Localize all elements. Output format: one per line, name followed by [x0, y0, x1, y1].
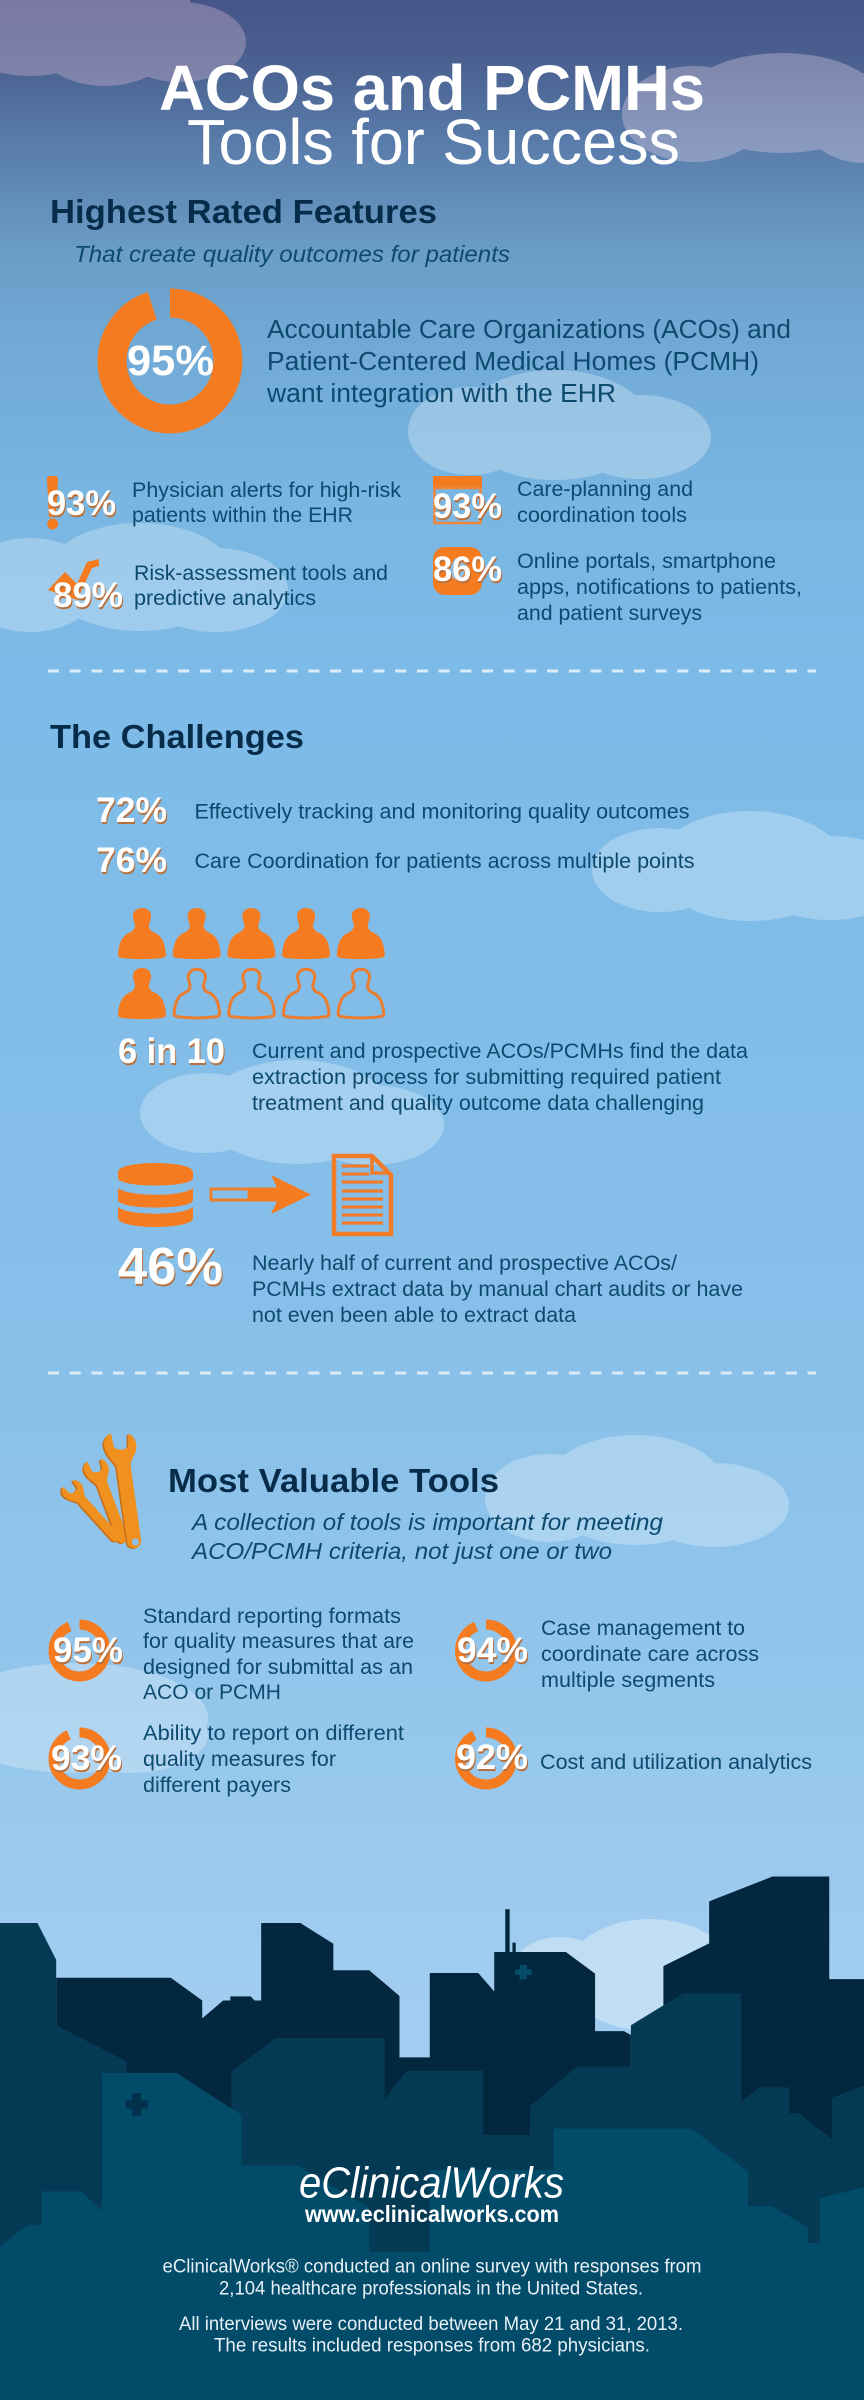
cloud: most valuable tools — [485, 1435, 789, 1547]
stat: 46%: Nearly half of current and prospective ACOs/ — [252, 1251, 677, 1275]
stat: 72%: 72% — [96, 791, 167, 830]
item: online portals 86%: apps, notifications to patients, — [517, 575, 802, 599]
item: case management 94% — [457, 1616, 759, 1692]
arrow — [211, 1175, 311, 1214]
mid buildings — [0, 1923, 864, 2400]
icon: calendar — [433, 476, 482, 523]
icon: hospital cross lower — [126, 2093, 148, 2116]
survey note: All interviews were conducted between May 21 and 31, 2013. — [179, 2314, 683, 2335]
stat: 6 in 10: Current and prospective ACOs/PCMHs find the data — [252, 1039, 748, 1063]
stat: 76% — [96, 841, 694, 880]
item: case management 94%: Case management to — [541, 1616, 745, 1640]
logo: www.eclinicalworks.com — [304, 2201, 559, 2227]
cloud: lower left — [0, 1663, 208, 1773]
icon: database — [118, 1163, 193, 1227]
stat: 6 in 10 — [118, 1032, 748, 1115]
stat: 6 in 10: extraction process for submitting required patient — [252, 1065, 721, 1089]
survey note: 2,104 healthcare professionals in the United States. — [219, 2279, 643, 2300]
item: standard reporting 95%: for quality measures that are — [143, 1629, 414, 1653]
heading: Highest Rated Features — [50, 194, 437, 231]
subheading: A collection of tools is important for meeting — [190, 1509, 663, 1535]
item: risk assessment 89% — [48, 559, 388, 615]
donut chart: 95%: 95% — [127, 337, 214, 385]
item: different payers 93%: Ability to report on different — [143, 1721, 404, 1745]
item: different payers 93%: different payers — [143, 1773, 291, 1797]
cloud: left behind risk assessment — [0, 523, 288, 632]
cloud: top right — [622, 53, 864, 163]
icon: exclamation mark — [47, 476, 58, 530]
icon: hospital cross upper — [515, 1965, 532, 1980]
donut — [460, 1732, 512, 1784]
item: physician alerts 93% — [47, 476, 401, 530]
item: standard reporting 95%: ACO or PCMH — [143, 1680, 281, 1704]
stat: 76%: Care Coordination for patients across multiple points — [194, 849, 694, 873]
item: standard reporting 95%: designed for submittal as an — [143, 1655, 413, 1679]
icon: app tile — [433, 547, 482, 595]
item: risk assessment 89%: predictive analytics — [134, 586, 316, 610]
item: physician alerts 93%: patients within the EHR — [132, 503, 353, 527]
item: risk assessment 89%: 89% — [53, 576, 123, 615]
title: Tools for Success — [187, 106, 680, 178]
item: case management 94%: 94% — [457, 1631, 528, 1670]
cloud: top left — [0, 0, 246, 86]
cloud: challenges middle — [140, 1060, 444, 1165]
item: care planning 93%: 93% — [433, 487, 502, 526]
stat: 6 in 10: 6 in 10 — [118, 1032, 225, 1071]
item: care planning 93%: Care-planning and — [517, 477, 693, 501]
item: standard reporting 95%: Standard reporting formats — [143, 1604, 401, 1628]
stat: 72%: Effectively tracking and monitoring quality outcomes — [194, 800, 690, 824]
item: care planning 93% — [433, 476, 693, 527]
logo — [299, 2158, 564, 2227]
item: cost analytics 92%: Cost and utilization analytics — [540, 1750, 812, 1774]
stat: 76%: 76% — [96, 841, 167, 880]
item: standard reporting 95%: 95% — [53, 1631, 123, 1670]
survey note: The results included responses from 682 physicians. — [214, 2336, 650, 2357]
item: risk assessment 89%: Risk-assessment tools and — [134, 561, 388, 585]
title — [159, 52, 705, 178]
item: cost analytics 92% — [456, 1732, 812, 1784]
donut — [54, 1624, 106, 1676]
title: ACOs and PCMHs — [159, 52, 705, 124]
icon: wrenches — [57, 1430, 151, 1551]
item: case management 94%: coordinate care across — [541, 1642, 759, 1666]
donut chart: 95% — [112, 303, 228, 419]
dark buildings — [56, 1877, 864, 2204]
logo: eClinicalWorks — [299, 2158, 564, 2208]
donut — [54, 1732, 106, 1784]
stat: 46%: 46% — [118, 1238, 223, 1296]
front buildings — [0, 2073, 864, 2400]
item: physician alerts 93%: Physician alerts for high-risk — [132, 478, 401, 502]
item: online portals 86%: Online portals, smartphone — [517, 549, 776, 573]
section: most valuable tools — [51, 1430, 812, 1797]
cloud: challenges right — [592, 811, 864, 921]
section: highest rated features — [47, 194, 802, 625]
item: case management 94%: multiple segments — [541, 1668, 715, 1692]
cloud: behind skyline — [510, 1919, 735, 2031]
survey note — [162, 2256, 702, 2357]
heading: Most Valuable Tools — [168, 1463, 499, 1500]
section: the challenges — [50, 719, 748, 1327]
survey note: eClinicalWorks® conducted an online survey with responses from — [162, 2256, 702, 2278]
item: different payers 93% — [51, 1721, 404, 1797]
stat: 46% — [118, 1238, 743, 1327]
city skyline — [0, 1877, 864, 2400]
item: different payers 93%: quality measures for — [143, 1747, 336, 1771]
description: Accountable Care Organizations (ACOs) and — [267, 316, 791, 344]
item: online portals 86%: and patient surveys — [517, 601, 702, 625]
item: online portals 86%: 86% — [433, 550, 502, 589]
donut — [460, 1624, 512, 1676]
description: Patient-Centered Medical Homes (PCMH) — [267, 348, 759, 376]
description — [266, 316, 791, 408]
stat: 46%: PCMHs extract data by manual chart audits or have — [252, 1277, 743, 1301]
icon: check mark — [48, 559, 99, 600]
subheading — [190, 1509, 663, 1564]
icon: 6 in 10 people — [118, 908, 385, 1019]
stat: 46%: not even been able to extract data — [252, 1303, 576, 1327]
subheading: ACO/PCMH criteria, not just one or two — [190, 1538, 612, 1564]
item: physician alerts 93%: 93% — [47, 484, 116, 523]
stat: 72% — [96, 791, 690, 830]
item: care planning 93%: coordination tools — [517, 503, 687, 527]
icon: document — [334, 1156, 391, 1234]
item: different payers 93%: 93% — [51, 1739, 122, 1778]
item: standard reporting 95% — [53, 1604, 414, 1704]
stat: 6 in 10: treatment and quality outcome data challenging — [252, 1091, 704, 1115]
description: want integration with the EHR — [266, 380, 616, 408]
cloud: upper middle — [408, 370, 711, 480]
heading: The Challenges — [50, 719, 304, 756]
subheading: That create quality outcomes for patients — [74, 241, 511, 267]
item: online portals 86% — [433, 547, 802, 625]
item: cost analytics 92%: 92% — [456, 1738, 528, 1777]
